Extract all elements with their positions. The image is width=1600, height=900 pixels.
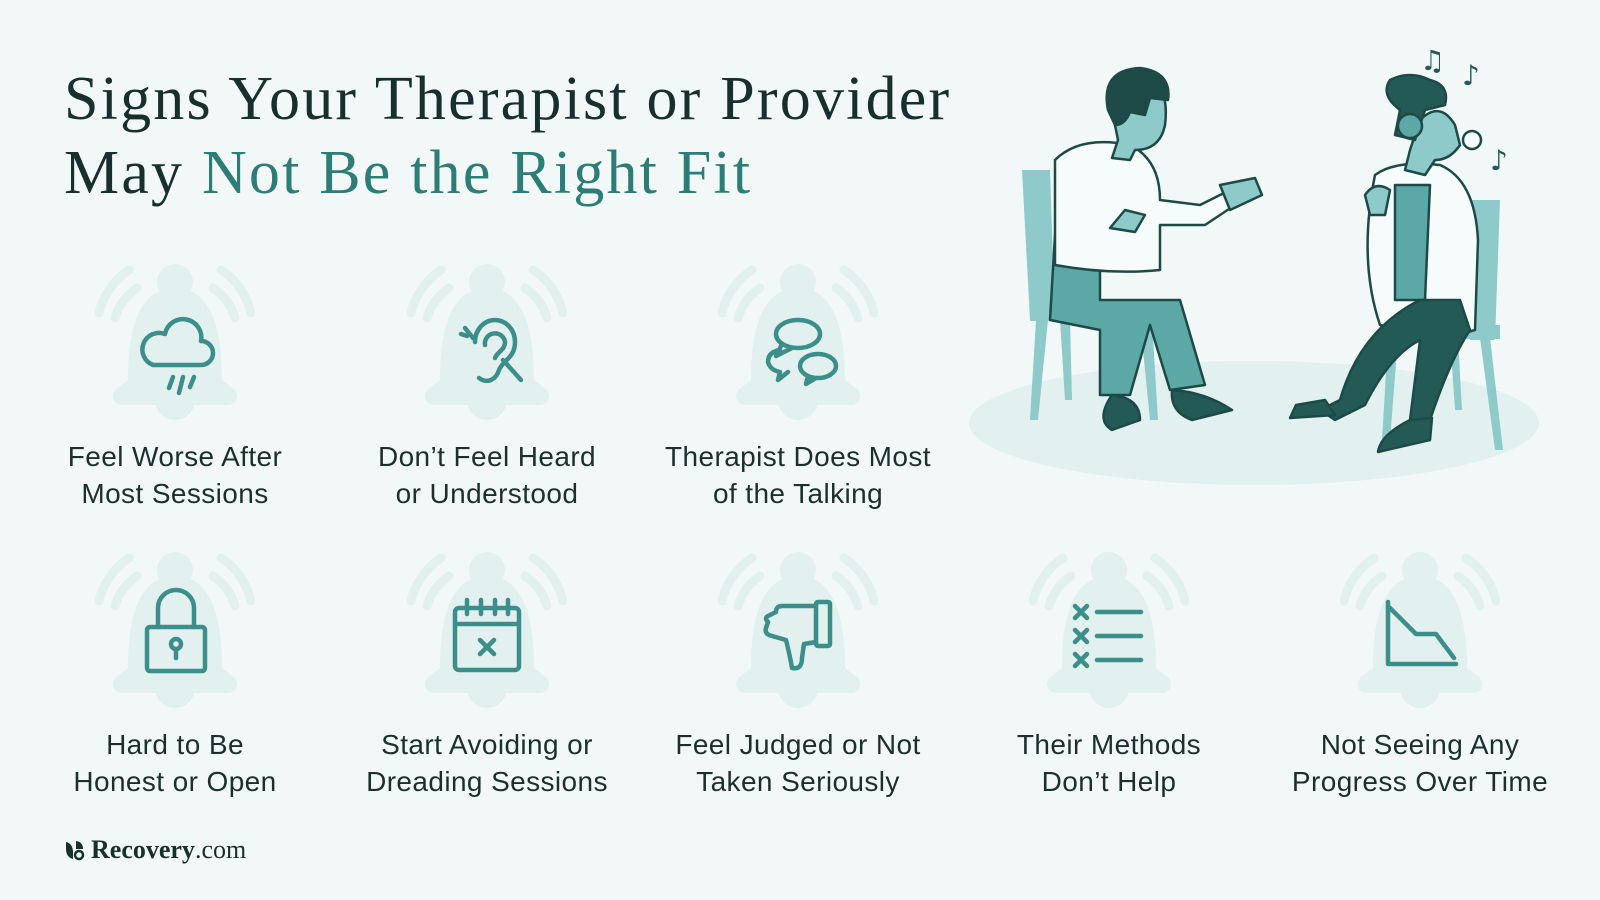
logo <box>66 835 246 864</box>
item: no progress: Progress Over Time <box>1292 766 1548 797</box>
floor <box>969 361 1539 485</box>
man <box>1050 68 1262 430</box>
item: no progress: Not Seeing Any <box>1321 729 1519 760</box>
item: methods don't help: Their Methods <box>1017 729 1201 760</box>
icon: calendar x <box>407 552 567 708</box>
title: Signs Your Therapist or Provider <box>64 65 951 133</box>
item: not heard: Don’t Feel Heard <box>378 441 596 472</box>
item: judged: Feel Judged or Not <box>675 729 921 760</box>
left chair <box>1022 170 1160 420</box>
item: methods don't help: Don’t Help <box>1042 766 1176 797</box>
icon: lock <box>95 552 255 708</box>
item: avoiding sessions: Start Avoiding or <box>381 729 593 760</box>
right chair <box>1380 200 1503 450</box>
item: judged: Taken Seriously <box>696 766 900 797</box>
item: avoiding sessions: Dreading Sessions <box>366 766 608 797</box>
music notes: ♫ <box>1420 44 1445 77</box>
illustration: therapy session <box>969 44 1539 485</box>
icon: declining chart <box>1340 552 1500 708</box>
icon: speech bubbles <box>718 264 878 420</box>
item: no progress <box>1292 552 1548 797</box>
music notes: ♪ <box>1462 59 1480 92</box>
music notes <box>1420 44 1508 177</box>
item: judged <box>675 552 921 797</box>
item: feel worse <box>68 264 282 509</box>
item: feel worse: Feel Worse After <box>68 441 282 472</box>
title <box>64 65 951 207</box>
item: therapist talking <box>665 264 931 509</box>
woman <box>1290 75 1481 452</box>
item: hard to be honest: Honest or Open <box>73 766 277 797</box>
item: hard to be honest: Hard to Be <box>106 729 244 760</box>
item: not heard <box>378 264 596 509</box>
logo: Recovery <box>91 835 195 864</box>
item: therapist talking: of the Talking <box>713 478 883 509</box>
item: methods don't help <box>1017 552 1201 797</box>
item: therapist talking: Therapist Does Most <box>665 441 931 472</box>
title: May Not Be the Right Fit <box>64 139 752 207</box>
music notes: ♪ <box>1490 144 1508 177</box>
icon: rain cloud <box>95 264 255 420</box>
icon: ear <box>407 264 567 420</box>
item: feel worse: Most Sessions <box>81 478 269 509</box>
item: not heard: or Understood <box>396 478 578 509</box>
icon: thumbs down <box>718 552 878 708</box>
logo: .com <box>195 835 246 864</box>
icon: x list <box>1029 552 1189 708</box>
item: hard to be honest <box>73 552 277 797</box>
item: avoiding sessions <box>366 552 608 797</box>
